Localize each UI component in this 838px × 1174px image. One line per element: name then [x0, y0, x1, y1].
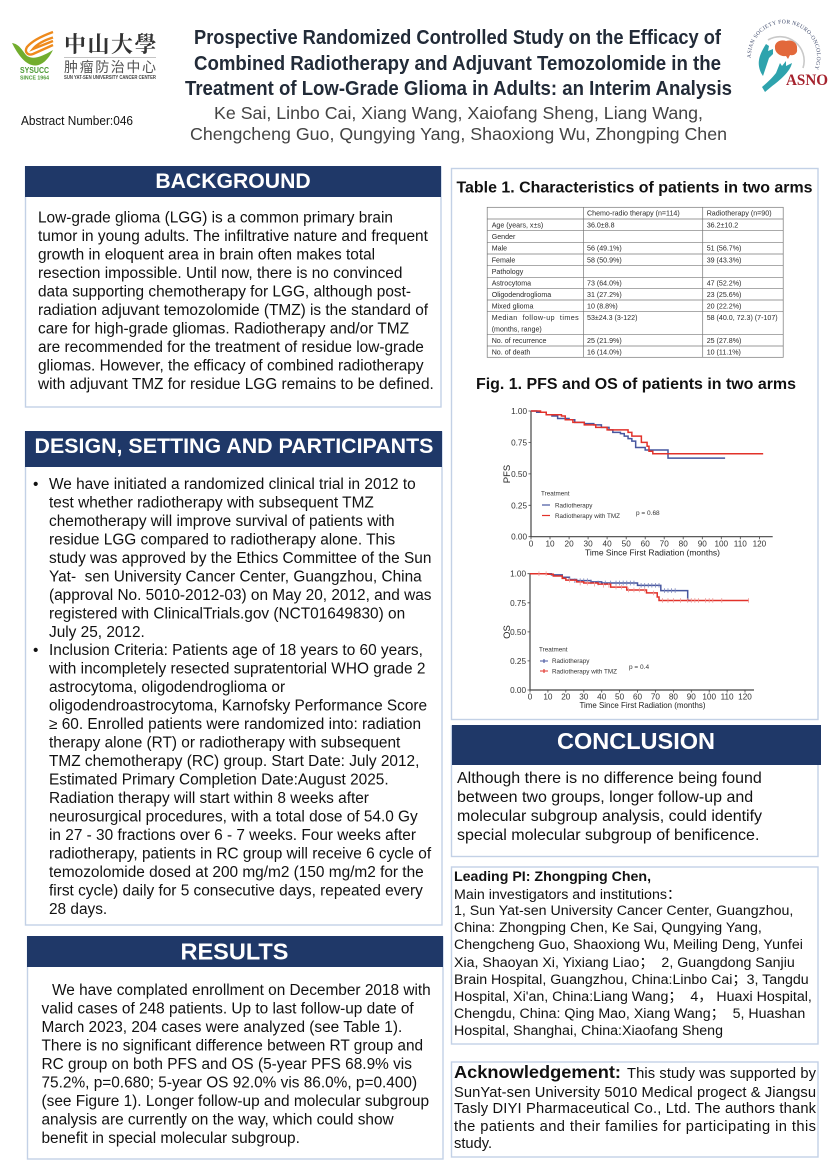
panel: design, setting and participants [25, 431, 442, 925]
logo text: university name: 中山大學 [64, 28, 158, 59]
table: patient characteristics: Mixed glioma [492, 302, 534, 310]
legend: OS [539, 647, 617, 676]
panel: design, setting and participants: DESIGN, SETTING AND PARTICIPANTS [35, 434, 433, 458]
text: inclusion criteria [48, 642, 432, 918]
table: patient characteristics: 23 (25.6%) [707, 291, 741, 299]
text: acknowledgement body: SunYat-sen University 5010 Medical progect & Jiangsu [454, 1085, 816, 1101]
heading: background [25, 166, 441, 197]
table: patient characteristics: 73 (64.0%) [587, 280, 622, 288]
title: Combined Radiotherapy and Adjuvant Temozolomide in the [194, 53, 721, 75]
text: inclusion criteria: Radiation therapy will start within 8 weeks after [49, 790, 369, 807]
icon: brain [775, 40, 797, 59]
chart: OS: 70 [651, 692, 660, 702]
text: conclusion body [457, 770, 762, 844]
text: acknowledgement heading: Acknowledgement: [454, 1062, 621, 1082]
text: trial description: chemotherapy will improve survival of patients with [49, 513, 395, 530]
text: background body [37, 209, 434, 393]
table: patient characteristics: 25 (27.8%) [707, 337, 741, 345]
panel: background [25, 166, 441, 407]
text: background body: resection impossible. Until now, there is no convinced [38, 265, 402, 282]
text: trial description [49, 476, 432, 641]
text: trial description: July 25, 2012. [49, 624, 145, 641]
chart: PFS: 120 [753, 540, 767, 548]
text: inclusion criteria: first cycle) daily for 5 consecutive days, repeated every [49, 882, 423, 899]
chart: PFS: 30 [584, 540, 593, 548]
text: conclusion body: special molecular subgroup of benificence. [457, 827, 759, 844]
title: Prospective Randomized Controlled Study on the Efficacy of [194, 27, 721, 49]
table: patient characteristics: Male [492, 245, 507, 253]
chart: OS: 0.25 [510, 657, 526, 666]
chart: PFS: 60 [641, 540, 650, 548]
chart: OS: 60 [633, 692, 642, 702]
text: inclusion criteria: ≥ 60. Enrolled patients were randomized into: radiation [49, 716, 421, 733]
table: patient characteristics: 10 (11.1%) [707, 348, 741, 356]
table: patient characteristics: No. of recurrence [492, 337, 547, 345]
table: patient characteristics: 39 (43.3%) [707, 256, 741, 264]
chart: PFS: 20 [565, 540, 574, 548]
text: inclusion criteria: temozolomide dosed at 200 mg/m2 (150 mg/m2 for the [49, 864, 424, 881]
panel: results [27, 936, 443, 1159]
bullet: first: • [33, 476, 38, 493]
authors [190, 103, 727, 144]
chart: PFS: 0.75 [511, 438, 527, 447]
text: investigators list: 1, Sun Yat-sen University Cancer Center, Guangzhou, [454, 903, 793, 919]
text: background body: data supporting chemotherapy for LGG, although post- [38, 283, 411, 300]
chart: OS: 1.00 [510, 570, 526, 579]
text: inclusion criteria: radiotherapy, patients in RC group will receive 6 cycle of [49, 845, 432, 862]
text: background body: with adjuvant TMZ for residue LGG remains to be defined. [37, 376, 434, 393]
chart: OS: 0.50 [510, 628, 526, 637]
text: results body: We have complated enrollment on December 2018 with [52, 982, 431, 999]
text: investigators list: Chengcheng Guo, Shaoxiong Wu, Meiling Deng, Yunfei [454, 937, 803, 953]
curves: OS [530, 571, 749, 603]
text: investigators list: Xia, Shaoyan Xi, Yixiang Liao； 2, Guangdong Sanjiu [454, 955, 795, 971]
chart: PFS: 90 [698, 540, 707, 548]
table: patient characteristics: 25 (21.9%) [587, 337, 622, 345]
table: patient characteristics: 47 (52.2%) [707, 280, 741, 288]
chart: PFS: 1.00 [511, 407, 527, 416]
text: results body: (see Figure 1). Longer follow-up and molecular subgroup [42, 1093, 429, 1110]
table: patient characteristics: Astrocytoma [492, 280, 531, 288]
table: patient characteristics: Gender [492, 233, 516, 241]
table: patient characteristics: 31 (27.2%) [587, 291, 622, 299]
annotation: OS p value: p = 0.4 [629, 664, 649, 671]
table: patient characteristics: 20 (22.2%) [707, 302, 741, 310]
text: background body: tumor in young adults. The infiltrative nature and frequent [38, 228, 429, 245]
text: conclusion body: between two groups, longer follow-up and [457, 789, 753, 806]
table: patient characteristics: (months, range) [492, 326, 542, 334]
legend: PFS: Radiotherapy [555, 502, 593, 510]
text: results body: 75.2%, p=0.680; 5-year OS 92.0% vis 86.0%, p=0.400) [42, 1074, 417, 1092]
chart: OS: 20 [561, 692, 571, 702]
chart: PFS [502, 407, 773, 558]
annotation: PFS p value: p = 0.68 [636, 510, 660, 517]
chart: OS [502, 570, 754, 710]
text: background body: Low-grade glioma (LGG) is a common primary brain [38, 209, 393, 226]
text: background body: are recommended for the treatment of residue low-grade [38, 339, 424, 356]
chart: OS: 100 [702, 692, 716, 702]
table: patient characteristics: 53±24.3 (3-122) [587, 314, 637, 322]
text: investigators list: Brain Hospital, Guangzhou, China:Linbo Cai；3, Tangdu [454, 972, 809, 988]
text: acknowledgement body [454, 1066, 817, 1152]
logo text: cancer center english: SUN YAT-SEN UNIVERSITY CANCER CENTER [64, 75, 156, 81]
text: inclusion criteria: 28 days. [49, 901, 107, 918]
text: trial description: residue LGG compared to radiotherapy alone. This [49, 531, 396, 548]
curves: PFS [531, 411, 763, 458]
text: investigators list: Main investigators and institutions： [454, 887, 681, 903]
text: results body: valid cases of 248 patients. Up to last follow-up date of [42, 1000, 414, 1018]
bullet: second: • [33, 642, 38, 659]
text: inclusion criteria: astrocytoma, oligodendroglioma or [49, 679, 285, 696]
legend: PFS [541, 491, 620, 520]
chart: PFS: 40 [603, 540, 612, 548]
table: patient characteristics: 58 (40.0, 72.3) (7-107) [707, 314, 778, 322]
text: background body: radiation adjuvant temozolomide (TMZ) is the standard of [38, 302, 429, 319]
table: patient characteristics [487, 207, 783, 357]
logo text: cancer center chinese: 肿瘤防治中心 [64, 57, 158, 77]
text: acknowledgement body: study. [454, 1136, 492, 1152]
text: investigators list: Chengdu, China: Qing Mao, Xiang Wang； 5, Huashan [454, 1006, 805, 1022]
authors: Chengcheng Guo, Qungying Yang, Shaoxiong Wu, Zhongping Chen [190, 124, 727, 144]
table: patient characteristics: Oligodendroglioma [492, 291, 551, 299]
text: trial description: We have initiated a randomized clinical trial in 2012 to [49, 476, 416, 493]
chart: PFS: 0 [529, 540, 534, 548]
text: trial description: (approval No. 5010-2012-03) on May 20, 2012, and was [49, 587, 432, 604]
table: patient characteristics: 16 (14.0%) [587, 348, 622, 356]
panel: investigators [452, 867, 818, 1044]
text: results body: RC group on both PFS and OS (5-year PFS 68.9% vis [42, 1056, 412, 1073]
legend: OS: Radiotherapy with TMZ [552, 668, 617, 676]
logo text: since 1964: SINCE 1964 [20, 76, 50, 82]
text: results body: There is no significant difference between RT group and [42, 1038, 423, 1054]
text: inclusion criteria: TMZ chemotherapy (RC) group. Start Date: July 2012, [49, 753, 419, 770]
text: results body [42, 982, 431, 1147]
icon: orange arcs [26, 32, 53, 55]
axis title: PFS x: Time Since First Radiation (months) [585, 548, 720, 558]
legend: PFS: Treatment [541, 491, 570, 498]
chart: PFS: 0.00 [511, 533, 527, 542]
logo text: SYSUCC: SYSUCC [20, 65, 49, 75]
logo: ASNO [747, 20, 828, 92]
chart: PFS: 10 [545, 540, 555, 548]
text: investigators list [454, 887, 812, 1039]
chart: PFS: 50 [622, 540, 631, 548]
chart: OS: 120 [738, 692, 752, 702]
table: patient characteristics: Chemo-radio therapy (n=114) [587, 210, 680, 218]
table: patient characteristics: Median follow-up times [492, 314, 579, 322]
text: background body: care for high-grade gliomas. Radiotherapy and/or TMZ [38, 320, 409, 337]
heading: design [25, 431, 442, 467]
heading: table 1: Table 1. Characteristics of patients in two arms [456, 180, 813, 196]
table: patient characteristics: 36.2±10.2 [707, 221, 738, 229]
text: investigators list: Hospital, Xi'an, China:Liang Wang； 4， Huaxi Hospital, [454, 989, 812, 1005]
table: patient characteristics: Age (years, x±s) [492, 221, 543, 229]
title [185, 27, 732, 100]
text: investigators list: Hospital, Shanghai, China:Xiaofang Sheng [454, 1023, 723, 1039]
panel: acknowledgement [452, 1062, 818, 1157]
text: inclusion criteria: oligodendroastrocytoma, Karnofsky Performance Score [49, 698, 427, 715]
text: conclusion body: molecular subgroup analysis, could identify [457, 808, 762, 825]
text: results body: benefit in special molecular subgroup. [42, 1130, 300, 1147]
chart: OS: 80 [669, 692, 678, 702]
chart: PFS: 70 [660, 540, 669, 548]
heading: conclusion [452, 725, 821, 765]
table: patient characteristics: 36.0±8.8 [587, 221, 615, 229]
icon: green swoosh [12, 43, 53, 66]
authors: Ke Sai, Linbo Cai, Xiang Wang, Xaiofang Sheng, Liang Wang, [214, 103, 703, 123]
text: conclusion body: Although there is no difference being found [457, 770, 762, 787]
text: trial description: Yat- sen University Cancer Center, Guangzhou, China [49, 568, 422, 585]
legend: PFS: Radiotherapy with TMZ [555, 513, 620, 520]
text: background body: growth in eloquent area in brain often makes total [38, 246, 375, 263]
text: inclusion criteria: Inclusion Criteria: Patients age of 18 years to 60 years, [49, 642, 423, 659]
table: patient characteristics: 10 (8.8%) [587, 302, 618, 310]
text: inclusion criteria: therapy alone (RT) or radiotherapy with subsequent [49, 735, 401, 752]
text: acknowledgement body: the patients and their families for participating in this [454, 1119, 816, 1135]
text: results body: March 2023, 204 cases were analyzed (see Table 1). [42, 1019, 402, 1036]
panel: conclusion: CONCLUSION [557, 728, 715, 754]
text: trial description: study was approved by the Ethics Committee of the Sun [49, 550, 431, 567]
text: inclusion criteria: in 27 - 30 fractions over 6 - 7 weeks. Four weeks after [49, 827, 416, 844]
table: patient characteristics: Radiotherapy (n=90) [707, 210, 772, 218]
text: inclusion criteria: neurosurgical procedures, with a total dose of 54.0 Gy [49, 808, 418, 825]
table: patient characteristics: 56 (49.1%) [587, 245, 622, 253]
table: patient characteristics: Pathology [492, 268, 524, 276]
text: trial description: registered with ClinicalTrials.gov (NCT01649830) on [49, 605, 405, 622]
text: inclusion criteria: with incompletely resected supratentorial WHO grade 2 [48, 661, 425, 678]
text: trial description: test whether radiotherapy with subsequent TMZ [49, 494, 374, 512]
axis title: OS y: OS [502, 625, 513, 639]
table: patient characteristics: No. of death [492, 348, 530, 356]
table: patient characteristics: 58 (50.9%) [587, 256, 622, 264]
legend: OS: Treatment [539, 647, 568, 654]
logo ring [768, 37, 804, 68]
abstract number: Abstract Number:046 [21, 114, 133, 128]
text: leading PI: Leading PI: Zhongping Chen, [454, 869, 651, 885]
chart: OS: 30 [579, 692, 589, 702]
chart: OS: 110 [721, 692, 734, 702]
text: results body: analysis are currently on the way, which could show [42, 1112, 395, 1128]
panel: background: BACKGROUND [155, 170, 311, 193]
chart: PFS: 0.25 [511, 501, 527, 510]
panel: table and figure [452, 168, 818, 720]
axis title: PFS y: PFS [502, 465, 513, 483]
logo: SYSUCC [12, 28, 158, 82]
heading: results [27, 936, 443, 967]
axis title: OS x: Time Since First Radiation (months) [580, 700, 706, 710]
chart: PFS: 100 [714, 540, 729, 548]
text: acknowledgement body: This study was supported by [627, 1066, 817, 1082]
table: patient characteristics: 51 (56.7%) [707, 245, 741, 253]
icon: hands [759, 44, 792, 92]
chart: PFS: 110 [734, 540, 747, 548]
table: patient characteristics: Female [492, 256, 515, 264]
text: inclusion criteria: Estimated Primary Completion Date:August 2025. [49, 772, 389, 788]
text: background body: gliomas. However, the efficacy of combined radiotherapy [38, 357, 424, 374]
chart: OS: 10 [543, 692, 553, 702]
panel: conclusion [452, 725, 821, 856]
chart: OS: 0.00 [510, 686, 526, 695]
chart: OS: 50 [615, 692, 625, 702]
text: investigators list: China: Zhongping Chen, Ke Sai, Qungying Yang, [454, 920, 762, 936]
chart: OS: 90 [687, 692, 696, 702]
heading: figure 1: Fig. 1. PFS and OS of patients in two arms [476, 376, 796, 393]
logo text: ASNO: ASNO [786, 72, 828, 89]
legend: OS: Radiotherapy [552, 658, 590, 665]
logo circular text: ASIAN SOCIETY FOR NEURO-ONCOLOGY [747, 20, 821, 70]
chart: OS: 0.75 [510, 599, 526, 608]
title: Treatment of Low-Grade Glioma in Adults: an Interim Analysis [185, 78, 732, 100]
chart: PFS: 0.50 [511, 470, 527, 479]
text: acknowledgement body: Tasly DIYI Pharmaceutical Co., Ltd. The authors thank [454, 1101, 817, 1117]
panel: results: RESULTS [181, 938, 288, 964]
chart: PFS: 80 [679, 540, 688, 548]
chart: OS: 40 [597, 692, 607, 702]
chart: OS: 0 [528, 692, 533, 702]
